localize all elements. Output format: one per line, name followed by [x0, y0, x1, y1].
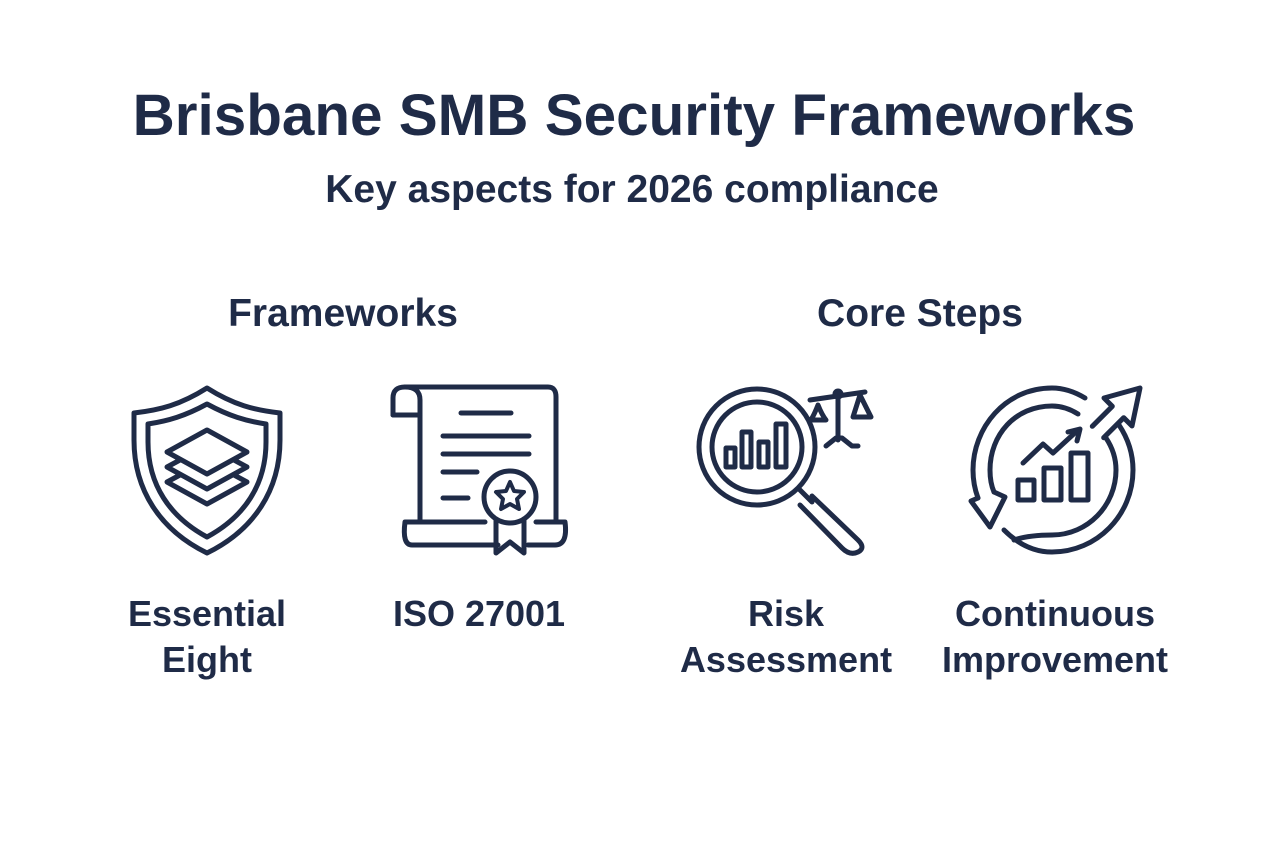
icon: continuous improvement cycle: [971, 388, 1140, 552]
icon: magnifier with chart and scales: [699, 389, 871, 553]
text: Eight: [162, 639, 252, 680]
label: ISO 27001: ISO 27001: [393, 593, 565, 634]
text: Improvement: [942, 639, 1168, 680]
heading: Frameworks: Frameworks: [228, 292, 458, 335]
label: Continuous Improvement: Continuous: [955, 593, 1155, 634]
heading: Core Steps: Core Steps: [817, 292, 1023, 335]
icon: certificate scroll: [393, 387, 566, 553]
title: Brisbane SMB Security Frameworks: [133, 83, 1135, 148]
text: Assessment: [680, 639, 892, 680]
label: Risk Assessment: Risk: [748, 593, 825, 634]
subtitle: Key aspects for 2026 compliance: [325, 168, 939, 211]
label: Essential Eight: Essential: [128, 593, 286, 634]
icon: shield with layers: [134, 388, 280, 553]
